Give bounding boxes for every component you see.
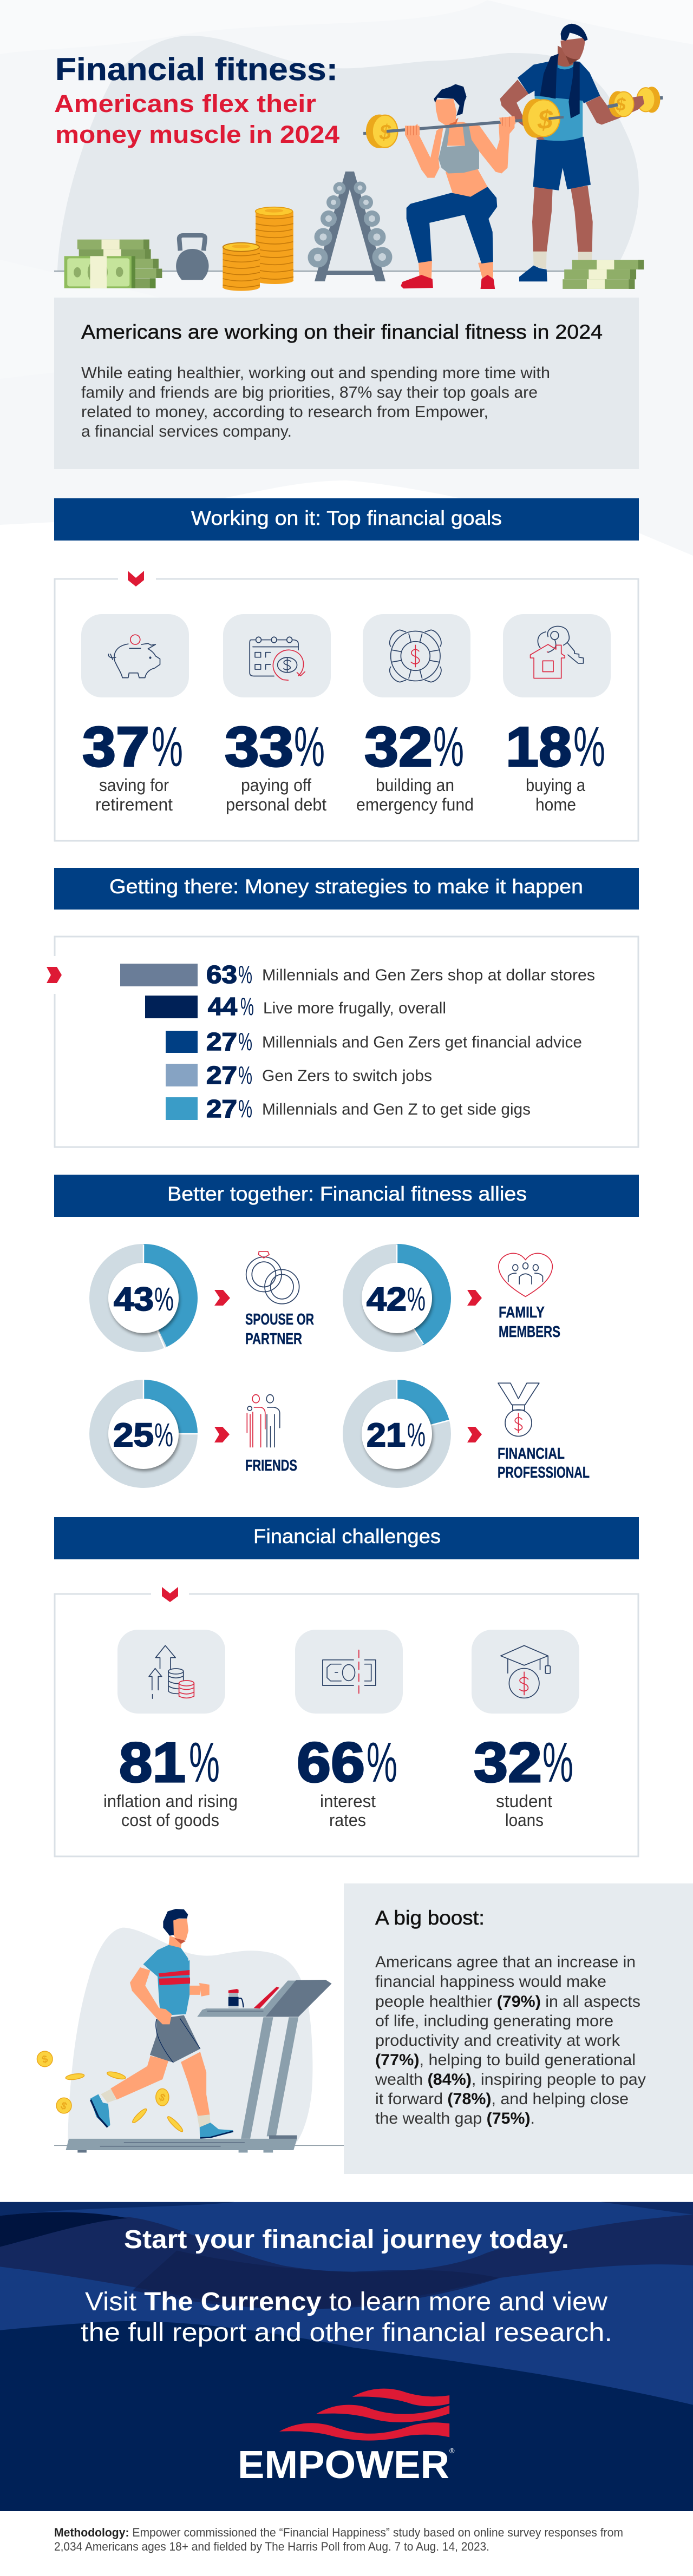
bar: 27% switch jobs: 27 [206,1061,237,1089]
panel: intro [54,298,639,469]
ally: financial professional: PROFESSIONAL [498,1464,590,1481]
section bar: financial challenges: Financial challenges [253,1525,441,1547]
barbell with coin weights: $ [537,104,553,135]
treadmill [66,1980,332,2152]
stat: 81% inflation and rising cost of goods: % [189,1731,220,1794]
stat: 81% inflation and rising cost of goods: inflation and rising [103,1791,238,1811]
stat: 66% interest rates: interest [320,1791,376,1811]
ally: friends [245,1395,297,1474]
stat: 32% student loans: % [542,1731,573,1794]
boost body text: (77%), helping to build generational [375,2051,636,2069]
bar: 44%: % [240,992,254,1020]
panel: financial challenges [55,1587,638,1856]
barbell with coin weights [363,98,564,148]
bar: 27% switch jobs: % [238,1061,252,1089]
stat: 37% saving for retirement: retirement [95,795,173,814]
barbell with coin weights: $ [379,121,391,144]
donut: 21% financial professional [352,1380,449,1478]
panel: top financial goals [55,571,638,841]
section bar: top financial goals: Working on it: Top financial goals [191,507,502,529]
bar: 27% financial advice: 27 [206,1027,237,1056]
intro heading: Americans are working on their financial fitness in 2024 [81,321,603,343]
falling coins: $ [158,2091,167,2104]
falling coins: $ [59,2099,69,2112]
section bar: financial fitness allies: Better together: Financial fitness allies [167,1183,527,1205]
donut: 43% spouse or partner: % [154,1281,174,1317]
icon: red chevron down [162,1587,178,1602]
woman figure [401,84,514,289]
icon: kettlebell [176,235,209,280]
stat: 66% interest rates [297,1731,397,1830]
panel: call to action [0,2202,693,2511]
boost body text: productivity and creativity at work [375,2032,620,2050]
stat: 32% student loans: loans [505,1810,544,1830]
bar: 27% financial advice: Millennials and Gen Zers get financial advice [262,1033,582,1051]
boost body text: of life, including generating more [375,2012,613,2030]
illustration: man and woman lifting coin weights [363,24,663,289]
stat: 32% building an emergency fund: emergency fund [356,795,474,814]
stat: 66% interest rates: % [367,1731,397,1794]
title: Financial fitness: [55,52,338,87]
runner figure [90,1909,233,2138]
CTA body: Visit The Currency to learn more and view [85,2288,607,2316]
stat: 81% inflation and rising cost of goods: 81 [119,1731,186,1794]
boost body text: it forward (78%), and helping close [375,2090,629,2108]
bar: 27% side gigs [166,1095,531,1123]
header background waves [0,0,693,556]
bar: 27% financial advice: % [238,1027,252,1056]
stat: 32% building an emergency fund [356,716,474,814]
Empower logo: ® [449,2447,455,2455]
icon: dumbbell weight rack [308,172,392,281]
stat: 33% paying off personal debt: personal debt [226,795,326,814]
icon: money pile right [563,260,644,289]
bar: 27% financial advice [166,1027,582,1056]
icon: right coin stack [255,207,293,284]
boost body text: the wealth gap (75%). [375,2110,535,2127]
Empower logo [238,2389,455,2487]
section bar: money strategies [54,868,639,910]
illustration: runner on treadmill [37,1909,344,2152]
stat: 32% building an emergency fund: building an [376,775,454,795]
Empower logo: EMPOWER [238,2443,449,2487]
bar: 27% side gigs: 27 [206,1095,237,1123]
icon: red chevron [214,1427,230,1442]
ally: spouse or partner [245,1251,314,1348]
backdrop blob [68,1928,312,2145]
illustration: money stack, kettlebell and coin stacks [64,207,293,291]
donut: 42% family members [352,1244,442,1344]
boost body text: people healthier (79%) in all aspects [375,1993,640,2011]
icon: red chevron [467,1290,482,1306]
ally: family members: FAMILY [499,1304,545,1321]
donut: 25% friends: 25 [113,1417,154,1453]
stat: 32% student loans: 32 [474,1731,542,1794]
stat: 33% paying off personal debt: % [294,716,325,779]
intro body text: family and friends are big priorities, 87% say their top goals are [81,384,538,401]
stat: 18% buying a home: % [573,716,605,779]
bar: 44%: Live more frugally, overall [263,999,446,1017]
donut: 43% spouse or partner: 43 [114,1281,154,1317]
icon: left coin stack [223,243,260,291]
icon: red chevron [467,1427,482,1442]
floor line [54,2145,344,2146]
section bar: financial fitness allies [54,1175,639,1217]
stat: 81% inflation and rising cost of goods [103,1731,238,1830]
donut: 21% financial professional: % [407,1417,426,1453]
CTA background waves [0,2202,693,2405]
stat: 18% buying a home: 18 [506,716,572,779]
section bar: top financial goals [54,498,639,541]
panel: money strategies bar chart [47,937,638,1147]
donut: 42% family members: 42 [367,1281,407,1317]
stat: 32% student loans [474,1731,573,1830]
intro body text: While eating healthier, working out and spending more time with [81,364,550,382]
icon tile: student loans [472,1630,579,1714]
stat: 33% paying off personal debt: 33 [225,716,293,779]
stat: 81% inflation and rising cost of goods: cost of goods [121,1810,219,1830]
intro body text [81,364,550,440]
bar: 63%: % [238,960,252,989]
title: Americans flex their [54,90,316,117]
bar: 27% side gigs: Millennials and Gen Z to get side gigs [262,1101,531,1118]
boost body text: wealth (84%), inspiring people to pay [375,2071,646,2089]
section bar: financial challenges [54,1517,639,1559]
bar: 27% switch jobs [166,1061,432,1089]
bar: 27% switch jobs: Gen Zers to switch jobs [262,1067,432,1085]
stat: 32% building an emergency fund: % [433,716,464,779]
dumbbell with coin weights: $ [615,95,626,115]
man figure [500,24,644,281]
stat: 18% buying a home: home [535,795,576,814]
ally: financial professional: FINANCIAL [498,1445,565,1462]
methodology note: 2,034 Americans ages 18+ and fielded by The Harris Poll from Aug. 7 to Aug. 14, 2023. [54,2540,489,2553]
dumbbell with coin weights [607,87,663,117]
ally: spouse or partner: SPOUSE OR [245,1311,314,1328]
bar: 27% side gigs: % [238,1095,252,1123]
donut: 25% friends [99,1380,198,1478]
methodology note [54,2526,623,2553]
stat: 37% saving for retirement [82,716,183,814]
ally: family members: MEMBERS [499,1323,560,1341]
bar: 63%: 63 [206,960,237,989]
icon: money pile left [64,240,162,288]
floor line [54,271,566,272]
icon: red chevron [214,1290,230,1306]
stat: 66% interest rates: rates [329,1810,366,1830]
ally: friends: FRIENDS [245,1457,297,1474]
stat: 33% paying off personal debt [225,716,326,814]
stat: 33% paying off personal debt: paying off [241,775,311,795]
donut: 42% family members: % [407,1281,426,1317]
bar: 63% [120,960,595,989]
methodology note: Methodology: Empower commissioned the “Financial Happiness” study based on online survey responses from [54,2526,623,2539]
stat: 32% building an emergency fund: 32 [364,716,433,779]
icon: red chevron down [128,571,144,587]
icon tile: rising costs [117,1630,225,1714]
boost body text: financial happiness would make [375,1973,606,1991]
icon: red chevron right [47,967,62,983]
CTA heading: Start your financial journey today. [124,2225,569,2254]
boost body text: Americans agree that an increase in [375,1953,636,1971]
water bottle [228,1989,244,2008]
stat: 37% saving for retirement: saving for [99,775,169,795]
title: money muscle in 2024 [55,121,339,148]
falling coins: $ [41,2053,49,2065]
boost heading: A big boost: [375,1907,485,1929]
stat: 66% interest rates: 66 [297,1731,365,1794]
stat: 32% student loans: student [496,1791,552,1811]
section bar: money strategies: Getting there: Money strategies to make it happen [109,875,583,898]
ally: family members [499,1253,560,1341]
donut: 43% spouse or partner [99,1244,188,1348]
header illustration backdrop blob [57,36,639,271]
intro body text: a financial services company. [81,423,292,440]
bar: 44% [145,992,446,1020]
intro body text: related to money, according to research from Empower, [81,403,488,421]
icon tile: life preserver [363,614,470,697]
stat: 18% buying a home: buying a [526,775,585,795]
stat: 37% saving for retirement: % [152,716,183,779]
panel: a big boost [344,1883,693,2174]
falling coins [37,2051,184,2133]
icon tile: house and keys [503,614,611,697]
ally: spouse or partner: PARTNER [245,1330,302,1348]
icon tile: interest rates bill [295,1630,403,1714]
donut: 21% financial professional: 21 [367,1417,406,1453]
icon tile: piggy bank [81,614,189,697]
CTA body [81,2288,612,2347]
icon tile: calendar with dollar [223,614,331,697]
bar: 44%: 44 [208,992,237,1020]
CTA body: the full report and other financial research. [81,2318,612,2347]
ally: financial professional [498,1383,590,1481]
stat: 18% buying a home [506,716,605,814]
bar: 63%: Millennials and Gen Zers shop at dollar stores [262,966,595,984]
title [54,52,339,148]
boost body text [375,1953,646,2127]
donut: 25% friends: % [154,1417,173,1453]
stat: 37% saving for retirement: 37 [82,716,149,779]
